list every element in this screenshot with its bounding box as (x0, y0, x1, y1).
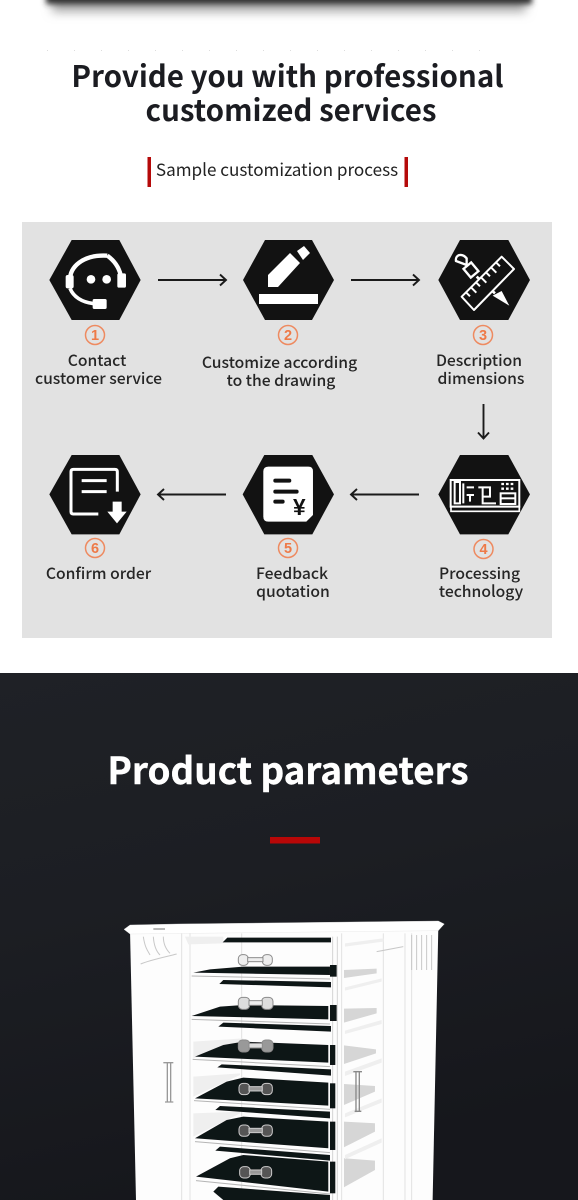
step 5: feedback quotation: 5 (284, 541, 292, 557)
arrow: step 2 to 3 (351, 274, 419, 286)
step 4: processing technology: technology (439, 579, 524, 602)
step 1: contact customer service: Contact (68, 348, 126, 371)
shadow of the product above (46, 0, 532, 12)
step 4: processing technology: 4 (479, 542, 488, 558)
step 6: confirm order (46, 455, 152, 584)
step 5: feedback quotation: ¥ (293, 494, 306, 520)
title: customized services (146, 88, 436, 130)
arrow: step 1 to 2 (158, 274, 226, 286)
step 6: confirm order: 6 (91, 541, 99, 557)
step 2: customize according to the drawing (202, 240, 357, 391)
step 2: customize according to the drawing: 2 (284, 328, 292, 344)
step 2: customize according to the drawing: Customize according (202, 350, 357, 373)
dotted line (47, 50, 505, 52)
arrow: step 4 to 5 (351, 489, 419, 500)
red accent bar (270, 837, 320, 844)
title: Provide you with professional (71, 54, 504, 96)
panel: customization process (22, 222, 552, 638)
heading: product parameters: Product parameters (107, 741, 469, 795)
arrow: step 5 to 6 (158, 489, 226, 500)
step 4: processing technology: Processing (439, 561, 520, 584)
product photo: acrylic drawer cabinet (124, 921, 444, 1200)
step 5: feedback quotation: quotation (256, 579, 330, 602)
step 1: contact customer service: 1 (91, 328, 99, 344)
step 2: customize according to the drawing: to the drawing (227, 368, 335, 391)
step 3: description dimensions: Description (436, 348, 522, 371)
step 5: feedback quotation: Feedback (256, 561, 328, 584)
panel: product parameters (0, 673, 578, 1200)
step 3: description dimensions: dimensions (438, 366, 524, 389)
step 4: processing technology (438, 455, 530, 602)
step 1: contact customer service (35, 240, 162, 389)
arrow: step 3 to 4 (478, 404, 489, 438)
title (71, 54, 504, 130)
step 1: contact customer service: customer service (35, 366, 162, 389)
step 3: description dimensions: 3 (479, 328, 487, 344)
step 5: feedback quotation (243, 455, 334, 602)
subtitle with red bars: Sample customization process (156, 156, 398, 181)
step 6: confirm order: Confirm order (46, 561, 152, 584)
step 3: description dimensions (436, 240, 530, 389)
